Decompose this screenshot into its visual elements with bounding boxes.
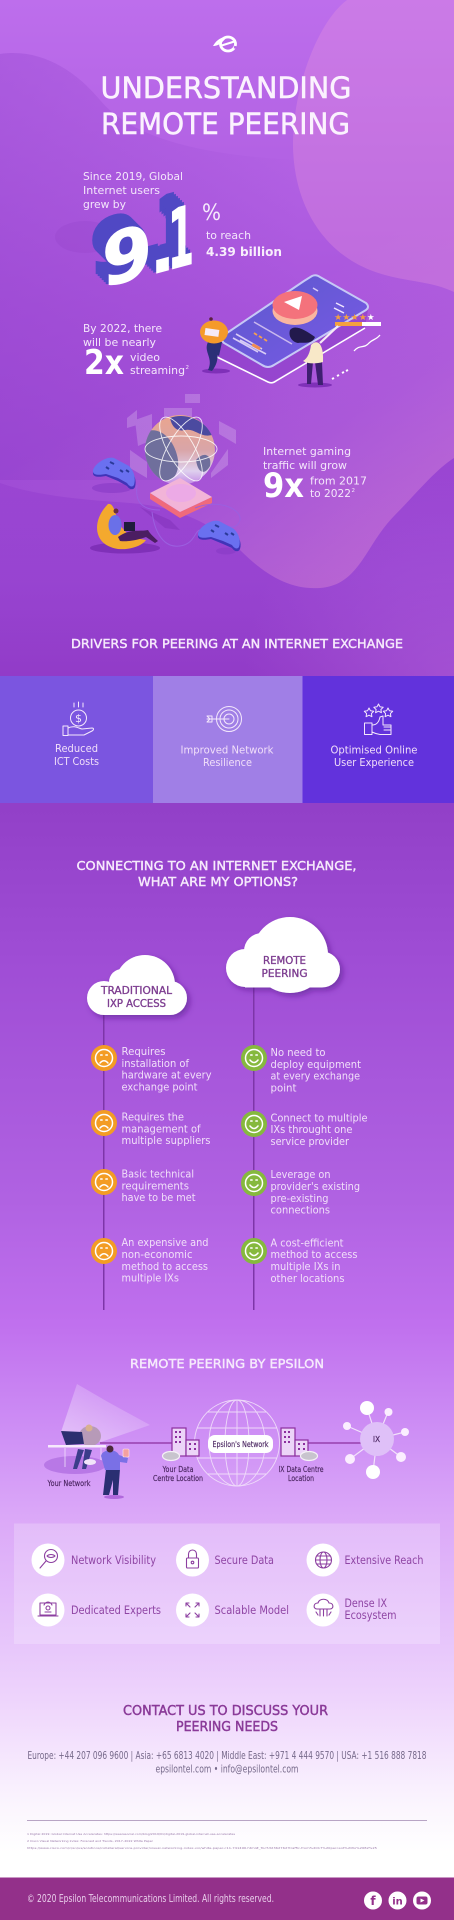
feature: secure data: Secure Data [214,1553,274,1567]
play button [272,291,318,325]
drawback 3: requirements [122,1180,189,1192]
cloud: remote peering: PEERING [262,968,308,980]
feature: network visibility: Network Visibility [71,1553,156,1567]
drawback 3 [122,1168,196,1204]
panel: improved network resilience: Resilience [203,756,252,769]
benefit 2: Connect to multiple [270,1112,368,1124]
benefit 2 [270,1112,368,1148]
background blob: upper left [0,53,300,480]
benefit 3: connections [270,1204,330,1216]
heading: remote peering by epsilon: REMOTE PEERING BY EPSILON [130,1356,324,1371]
feature: scalable model: Scalable Model [214,1603,289,1617]
stat: video streaming 2x: video [130,351,160,364]
diagram: remote peering network [44,1384,409,1499]
happy icon 4 [241,1238,267,1264]
person with tablet [200,317,230,374]
cloud: traditional IXP access [87,955,187,1015]
timeline line: remote [253,985,254,1310]
feature: dense IX ecosystem: Ecosystem [344,1608,396,1622]
decorative ellipse behind figure [55,221,115,253]
icon: coin in hand: $ [75,712,82,725]
stat: video streaming 2x: 2x [84,343,124,383]
heading: contact: PEERING NEEDS [176,1719,278,1735]
title: REMOTE PEERING [101,107,350,141]
benefit 4: A cost-efficient [270,1236,344,1250]
divider [27,1820,427,1821]
figure 9.1 extrusion: 1 [160,179,186,282]
benefit 1: point [270,1082,297,1094]
panel: optimised online user experience [302,676,454,803]
stat: internet users 9.1%: 1 [166,185,192,288]
drawback 1: exchange point [122,1080,198,1094]
figure 9.1: 9 [102,208,152,305]
drawback 4: An expensive and [122,1236,208,1249]
person on beanbag [90,504,160,554]
benefit 4: method to access [270,1248,358,1261]
icon: linkedin [388,1892,406,1910]
icon: stars and thumb [364,704,393,734]
drawback 4 [122,1236,208,1284]
drawback 1: hardware at every [122,1068,212,1082]
benefit 4: multiple IXs in [270,1260,341,1273]
feature: secure data [176,1544,274,1576]
panel: reduced ICT costs: ICT Costs [54,755,99,768]
icon: facebook [364,1892,382,1910]
benefit 3: pre-existing [270,1192,328,1205]
title [100,71,352,141]
feature: extensive reach [306,1544,424,1576]
panel: improved network resilience: Improved Network [180,744,274,756]
panel: optimised online user experience: Optimised Online [330,744,418,756]
dots [332,370,348,379]
benefit 3 [270,1168,360,1216]
happy icon 3 [241,1170,267,1196]
illustration: phone with video [200,275,381,388]
benefit 1: deploy equipment [270,1058,362,1071]
footnotes [27,1832,377,1850]
figure 9.1 extrusion: 9 [100,206,150,303]
feature: dense IX ecosystem: Dense IX [344,1596,387,1610]
user at desk [44,1384,150,1474]
diagram labels: Your Network [47,1479,91,1488]
stat: gaming 9x: 9x [263,466,304,506]
heading: contact [123,1703,328,1735]
figure 9.1 extrusion: . [138,195,163,279]
stat: video streaming 2x: 2 [186,365,189,371]
contact details: epsilontel.com • info@epsilontel.com [156,1764,298,1776]
stat: internet users 9.1%: % [202,201,221,226]
squiggle [354,335,380,351]
epsilon network label [208,1435,273,1453]
benefit 3: provider's existing [270,1180,360,1193]
figure 9.1 extrusion: 9 [92,198,142,295]
title: UNDERSTANDING [100,71,352,105]
illustration: online gaming [90,394,241,554]
panel: improved network resilience [153,676,302,803]
stat: internet users 9.1% [55,170,282,307]
diagram labels: Location [288,1474,314,1483]
drawback 4: non-economic [122,1248,192,1261]
feature: dedicated experts [32,1594,161,1626]
sad icon 1 [91,1045,117,1071]
benefit 1: at every exchange [270,1070,360,1082]
benefit 2: IXs throught one [270,1123,353,1136]
background glow behind drivers heading [0,466,454,676]
stat: internet users 9.1%: to reach [206,229,251,242]
sad icon 2 [91,1110,117,1136]
network globe [194,1400,280,1486]
stat: gaming 9x: Internet gaming [263,445,351,458]
diagram labels: Your Data [162,1465,194,1474]
connection line [100,1442,362,1444]
benefit 4: other locations [270,1272,345,1285]
panel: service features [14,1524,440,1644]
star rating [334,313,381,326]
heading: drivers: DRIVERS FOR PEERING AT AN INTERNET EXCHANGE [71,636,403,651]
icon: target with arrow [207,706,242,732]
console [140,478,212,530]
drawback 2 [122,1110,211,1147]
figure 9.1 extrusion: 9 [96,202,146,299]
data centre left [162,1428,199,1460]
benefit 3: Leverage on [270,1168,331,1181]
figure 9.1 extrusion [90,175,192,305]
logo [213,37,238,51]
cloud: remote peering: REMOTE [263,955,306,967]
footnotes: 2 Cisco Visual Networking Index: Forecast and Trends, 2017–2022 White Paper [27,1839,154,1843]
stat: video streaming 2x [83,322,189,383]
heading: connecting options: CONNECTING TO AN INTERNET EXCHANGE, [76,858,356,873]
background shade below hero wave [0,458,454,676]
stat: gaming 9x: 2 [352,488,355,494]
stat: video streaming 2x: By 2022, there [83,322,162,335]
stat: gaming 9x: traffic will grow [263,459,347,472]
icon: coin in hand [63,702,94,736]
drawback 4: multiple IXs [122,1272,179,1284]
heading: connecting options: WHAT ARE MY OPTIONS? [138,874,298,889]
sad icon 3 [91,1169,117,1195]
benefit 4 [270,1236,358,1285]
stat: internet users 9.1%: Internet users [83,184,160,197]
footer bar: © 2020 Epsilon Telecommunications Limited. All rights reserved. [27,1893,274,1905]
footnotes: 1 Digital 2019: Global Internet Use Accelerates: https://wearesocial.com/blog/2019/01/digital-2019-global-internet-use-accelerates [27,1832,236,1836]
cloud: remote peering [226,917,340,993]
cloud: traditional IXP access: IXP ACCESS [107,998,166,1010]
stat: gaming 9x: to 2022 [310,487,351,500]
drawback 1: Requires [122,1045,166,1058]
sad icon 4 [91,1238,117,1264]
background blob: hero wave [0,230,454,588]
background blob: upper right [293,0,454,292]
figure 9.1 extrusion: . [144,201,169,285]
figure 9.1 extrusion: 9 [98,204,148,301]
drawback 2: multiple suppliers [122,1134,211,1147]
drawback 4: method to access [122,1260,208,1273]
controller right [198,521,241,554]
floating panels [127,394,236,478]
benefit 1 [270,1046,362,1094]
panel: reduced ICT costs [0,676,153,803]
star rating: ★★★★ [334,313,367,323]
stat: video streaming 2x: streaming [130,364,185,377]
figure 9.1 extrusion: 9 [94,200,144,297]
drawback 3: have to be met [122,1191,196,1204]
drawback 2: management of [122,1122,202,1136]
footnotes: https://www.cisco.com/c/en/us/solutions/collateral/service-provider/visual-networking-index-vni/white-paper-c11-741490.html#_Toc532362762?traffic-from%2017%20percent%20to%2082%25 [27,1846,377,1850]
figure 9.1 extrusion: 1 [162,181,188,284]
list: remote peering benefits [241,1045,368,1285]
stat: gaming 9x: from 2017 [310,474,367,488]
stat: internet users 9.1%: 1 [168,187,194,290]
stat: video streaming 2x: will be nearly [83,336,156,349]
figure 9.1 extrusion: . [142,199,167,283]
stat: gaming 9x [263,445,367,506]
stat: internet users 9.1%: 4.39 billion [206,244,282,259]
data centre right [281,1428,318,1460]
feature: dedicated experts: Dedicated Experts [71,1603,161,1617]
contact details [28,1750,426,1776]
feature: network visibility [32,1544,156,1576]
heading: connecting options [76,858,356,889]
happy icon 1 [241,1045,267,1071]
feature: extensive reach: Extensive Reach [344,1553,424,1567]
figure 9.1 extrusion: 9 [90,196,140,293]
diagram labels: IX Data Centre [278,1465,324,1474]
drawback 3: Basic technical [122,1168,194,1180]
stat: internet users 9.1%: 1 [164,183,190,286]
drawback 1 [122,1045,212,1094]
feature: scalable model [176,1594,289,1626]
footer bar [0,1878,454,1920]
happy icon 2 [241,1111,267,1137]
globe orbits [145,411,217,487]
heading: contact: CONTACT US TO DISCUSS YOUR [123,1703,328,1719]
diagram labels [47,1465,324,1488]
epsilon network label: Epsilon's Network [212,1440,269,1449]
benefit 1: No need to [270,1046,326,1059]
standing person with phone [101,1446,129,1499]
icon: youtube [413,1892,431,1910]
drawback 2: Requires the [122,1110,184,1124]
panel: reduced ICT costs: Reduced [55,742,98,755]
figure 9.1 [102,187,194,307]
icon: linkedin: in [392,1896,403,1908]
cloud: traditional IXP access: TRADITIONAL [100,985,172,997]
IX hub [343,1401,409,1479]
list: traditional IXP access drawbacks [91,1045,212,1284]
drawback 1: installation of [122,1057,190,1070]
stat: internet users 9.1%: Since 2019, Global [83,170,183,183]
person woman [289,326,338,388]
figure 9.1 extrusion: 1 [158,177,184,280]
diagram labels: Centre Location [153,1474,203,1483]
figure 9.1 extrusion: 1 [156,175,182,278]
globe [145,415,215,485]
timeline line: traditional [103,1012,104,1310]
figure 9.1 extrusion: . [148,205,173,289]
icon: facebook: f [370,1894,376,1908]
stat: internet users 9.1%: grew by [83,198,126,211]
figure 9.1: . [150,207,175,291]
feature: dense IX ecosystem [306,1594,396,1626]
star rating: ★ [367,313,375,323]
figure 9.1 extrusion: . [140,197,165,281]
panel: optimised online user experience: User Experience [334,756,414,769]
controller left [92,458,136,493]
cables [137,485,240,546]
benefit 2: service provider [270,1135,349,1148]
IX hub: IX [373,1435,380,1444]
figure 9.1 extrusion: . [146,203,171,287]
